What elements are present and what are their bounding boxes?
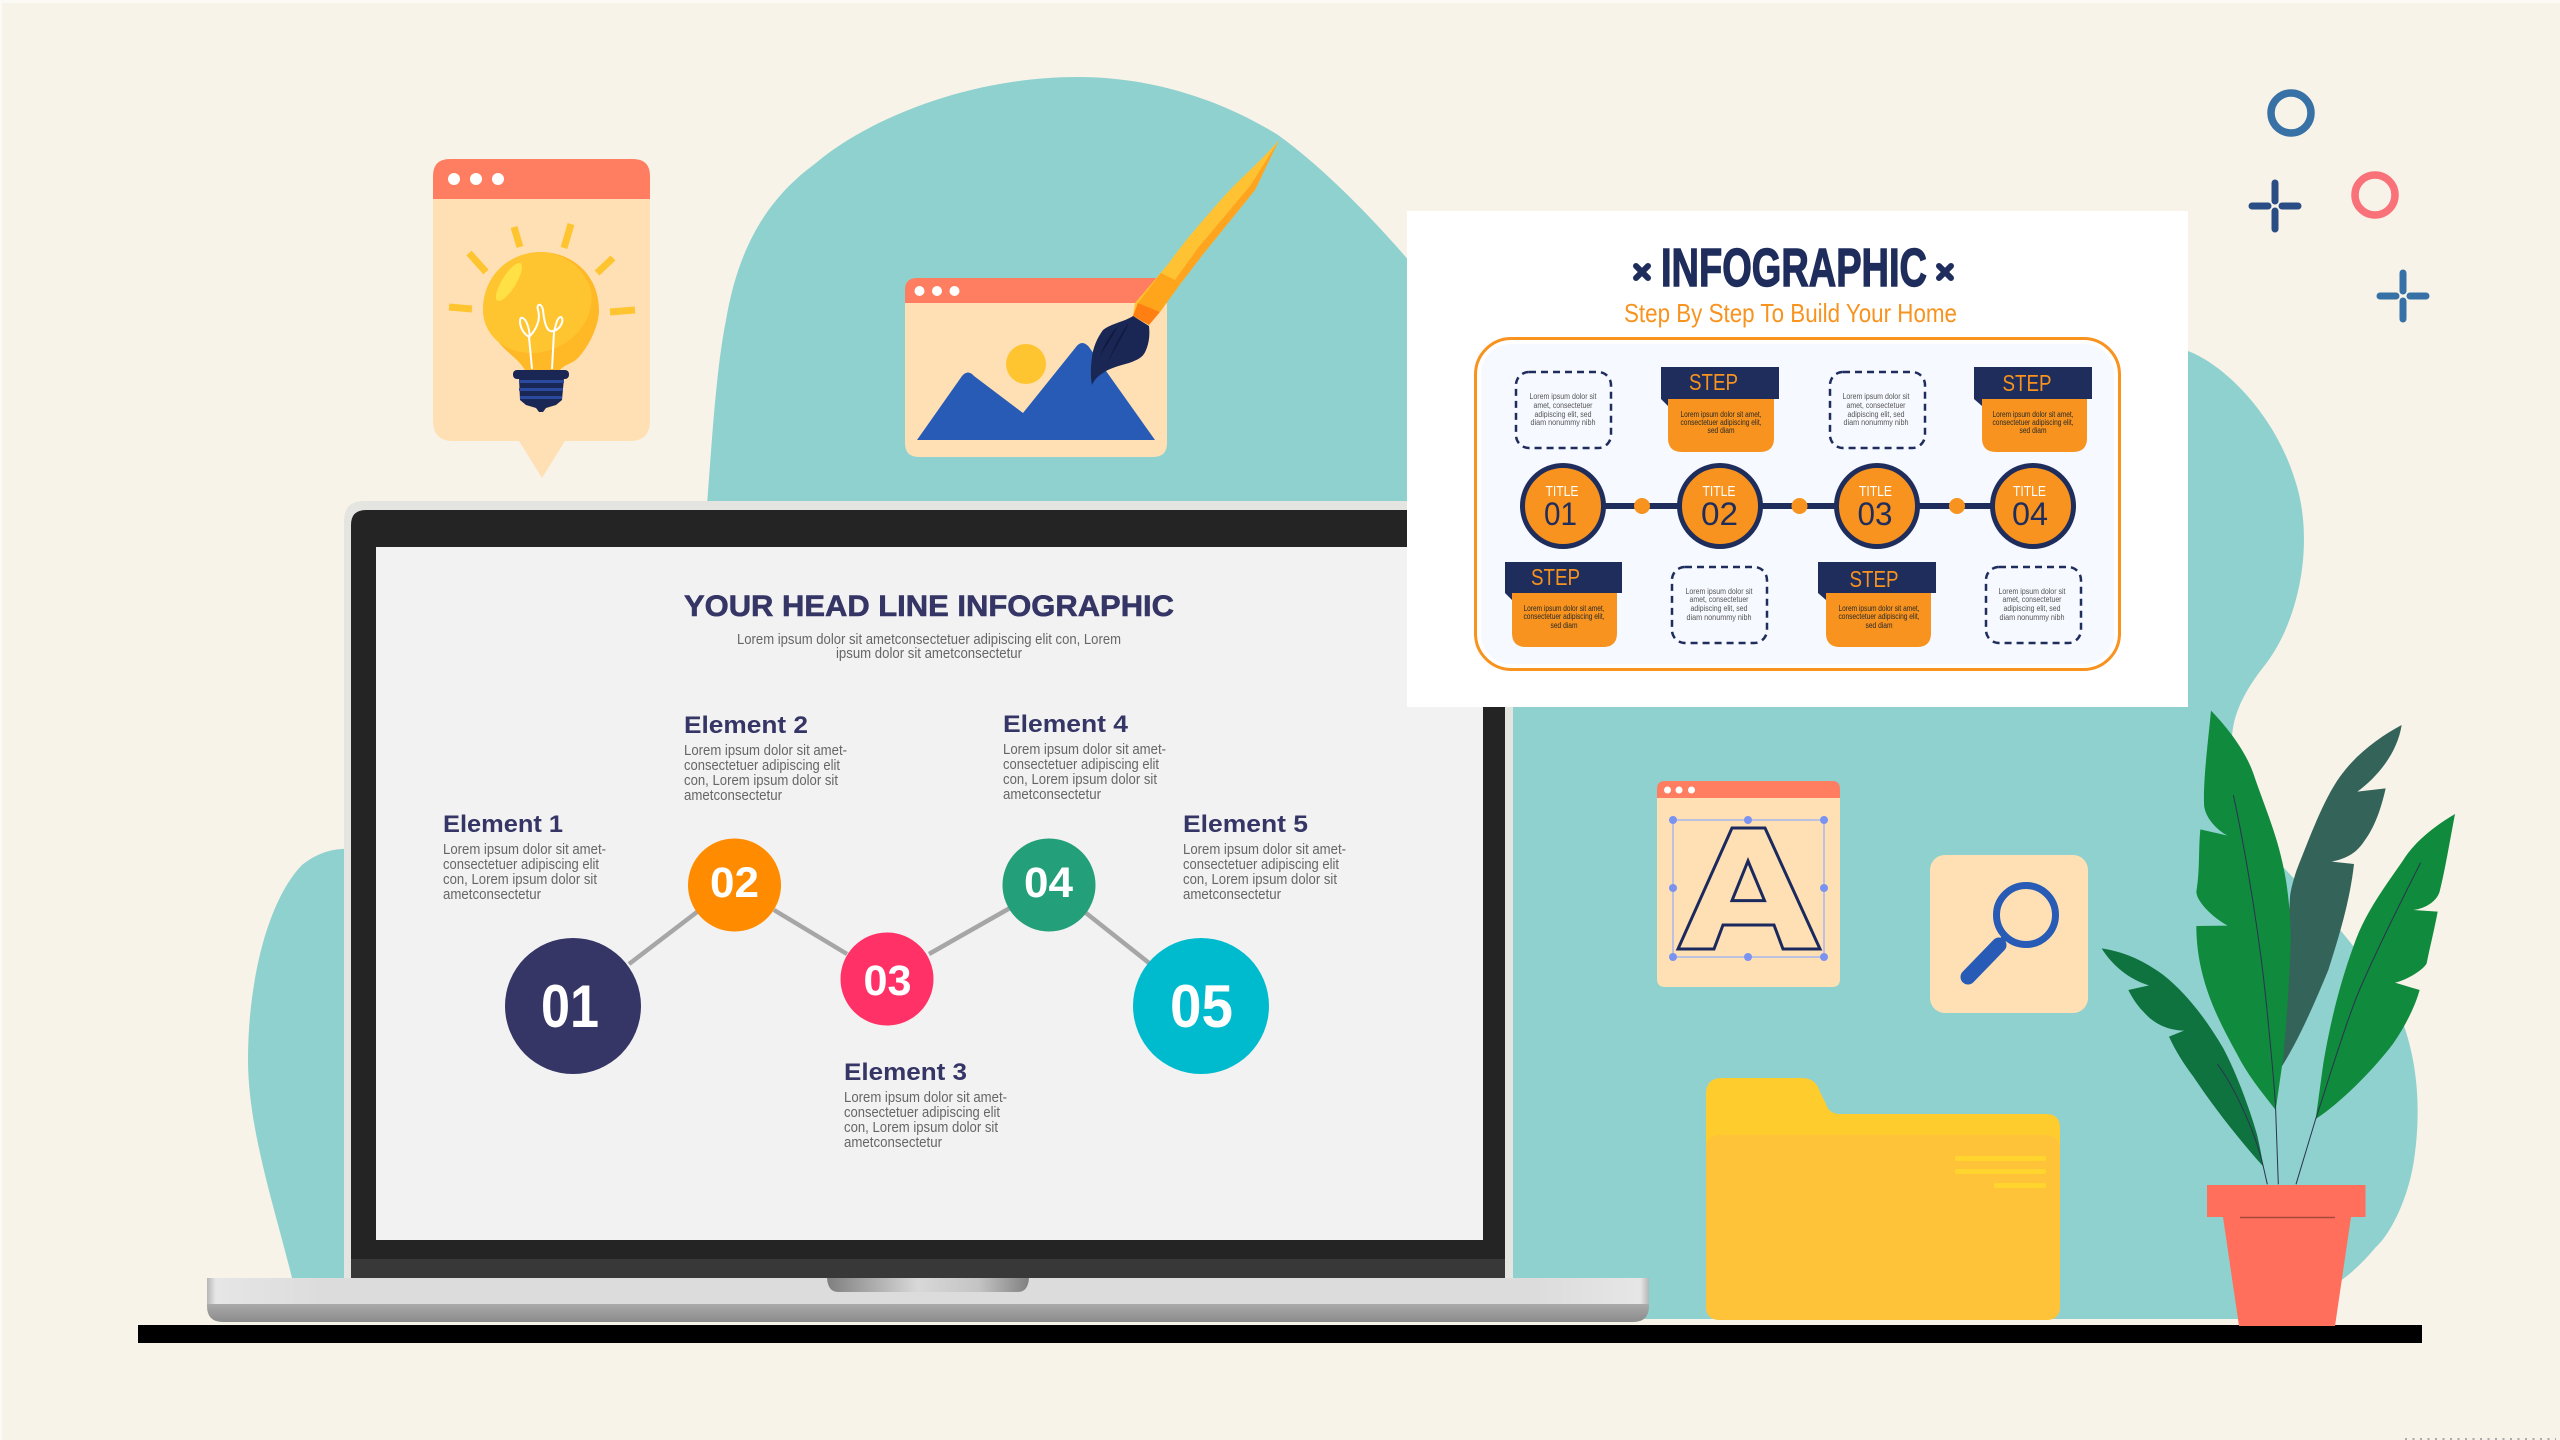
step 04 circle <box>1002 838 1096 932</box>
element 2 text: consectetuer adipiscing elit <box>684 757 841 774</box>
potted plant <box>2102 711 2455 1326</box>
step card top 2: consectetuer adipiscing elit, <box>1680 418 1762 427</box>
icon: image card with paint brush <box>905 140 1279 457</box>
step 02 circle: 02 <box>710 859 759 907</box>
screen subheading: Lorem ipsum dolor sit ametconsectetuer adipiscing elit con, Lorem <box>737 631 1121 648</box>
element 1 text: consectetuer adipiscing elit <box>443 856 600 873</box>
step 03 circle: 03 <box>864 957 912 1005</box>
element 5 text: Element 5 <box>1183 811 1308 838</box>
step 01 circle <box>505 938 641 1074</box>
element 2 text: ametconsectetur <box>684 787 782 804</box>
title circle 01: 01 <box>1544 496 1577 532</box>
dashed note bottom 2: adipiscing elit, sed <box>1690 604 1748 613</box>
step card bottom 1: consectetuer adipiscing elit, <box>1524 612 1604 621</box>
element 4 text: ametconsectetur <box>1003 786 1101 803</box>
dashed note top 1: diam nonummy nibh <box>1530 418 1596 427</box>
element 3 text: con, Lorem ipsum dolor sit <box>844 1119 999 1136</box>
dashed note top 3: Lorem ipsum dolor sit <box>1842 392 1910 401</box>
element 5 text: ametconsectetur <box>1183 886 1281 903</box>
laptop base <box>207 1278 1649 1322</box>
step card top 2: sed diam <box>1708 426 1735 435</box>
element 1 text: Lorem ipsum dolor sit amet- <box>443 841 606 858</box>
title circle 02: TITLE <box>1702 483 1736 500</box>
step 04 circle: 04 <box>1024 859 1073 907</box>
dashed note top 1: adipiscing elit, sed <box>1534 410 1592 419</box>
dashed note bottom 4: Lorem ipsum dolor sit <box>1998 587 2066 596</box>
connector lines <box>629 908 1149 964</box>
element 2 text: Element 2 <box>684 712 808 739</box>
dashed note top 3: amet, consectetuer <box>1846 401 1906 410</box>
element 3 text: consectetuer adipiscing elit <box>844 1104 1001 1121</box>
element 3 text <box>844 1059 1007 1151</box>
panel subtitle: Step By Step To Build Your Home <box>1624 298 1957 328</box>
element 4 text: con, Lorem ipsum dolor sit <box>1003 771 1158 788</box>
step card bottom 1 <box>1505 562 1622 647</box>
icon: decorative circles and crosses <box>2252 93 2426 319</box>
element 1 text <box>443 811 606 903</box>
element 2 text: Lorem ipsum dolor sit amet- <box>684 742 847 759</box>
step 02 circle <box>688 838 781 932</box>
dashed note top 3: diam nonummy nibh <box>1844 418 1908 427</box>
title circle 01 <box>1522 466 1604 546</box>
title circle 02: 02 <box>1701 496 1738 532</box>
step card bottom 3: consectetuer adipiscing elit, <box>1838 612 1920 621</box>
dashed note top 3: adipiscing elit, sed <box>1848 410 1904 419</box>
element 5 text: consectetuer adipiscing elit <box>1183 856 1340 873</box>
dashed note bottom 4: amet, consectetuer <box>2002 595 2062 604</box>
title circle 01: TITLE <box>1546 483 1578 500</box>
element 5 text: Lorem ipsum dolor sit amet- <box>1183 841 1346 858</box>
step card bottom 1: sed diam <box>1550 621 1578 630</box>
element 5 text <box>1183 811 1346 903</box>
dashed note bottom 4: diam nonummy nibh <box>2000 613 2064 622</box>
element 3 text: ametconsectetur <box>844 1134 942 1151</box>
step card bottom 3: STEP <box>1850 566 1898 592</box>
dashed note bottom 2: Lorem ipsum dolor sit <box>1686 587 1753 596</box>
title circle 03: TITLE <box>1859 483 1892 500</box>
element 1 text: Element 1 <box>443 811 563 838</box>
shelf <box>138 1325 2422 1343</box>
icon: magnifier card <box>1930 855 2088 1013</box>
icon: letter A type card <box>1657 781 1840 987</box>
element 2 text <box>684 712 847 804</box>
step card top 4 <box>1974 367 2092 452</box>
step 01 circle: 01 <box>541 973 599 1040</box>
step card top 4: sed diam <box>2020 426 2047 435</box>
step 05 circle: 05 <box>1170 973 1233 1040</box>
laptop <box>207 501 1649 1322</box>
screen subheading <box>737 631 1121 662</box>
step card top 2: STEP <box>1689 369 1738 395</box>
dashed note bottom 2: amet, consectetuer <box>1690 595 1749 604</box>
element 4 text: Lorem ipsum dolor sit amet- <box>1003 741 1166 758</box>
element 1 text: con, Lorem ipsum dolor sit <box>443 871 598 888</box>
step card top 2: Lorem ipsum dolor sit amet, <box>1680 410 1762 419</box>
plant leaves <box>2102 711 2455 1184</box>
step card top 4: Lorem ipsum dolor sit amet, <box>1992 410 2074 419</box>
icon: light bulb card <box>433 159 650 478</box>
title circle 04: 04 <box>2012 496 2048 532</box>
element 3 text: Lorem ipsum dolor sit amet- <box>844 1089 1007 1106</box>
panel title: INFOGRAPHIC <box>1661 238 1927 298</box>
flower pot <box>2207 1185 2366 1326</box>
panel: step by step infographic card <box>1407 211 2188 707</box>
step card bottom 3: Lorem ipsum dolor sit amet, <box>1838 604 1920 613</box>
dashed note top 1: amet, consectetuer <box>1534 401 1593 410</box>
step card bottom 3 <box>1818 562 1936 647</box>
dashed note top 1 <box>1516 372 1611 448</box>
step 03 circle <box>840 932 934 1026</box>
element 2 text: con, Lorem ipsum dolor sit <box>684 772 839 789</box>
timeline connector <box>1563 498 2033 514</box>
screen headline: YOUR HEAD LINE INFOGRAPHIC <box>684 590 1174 623</box>
dashed note bottom 2 <box>1672 567 1767 643</box>
element 1 text: ametconsectetur <box>443 886 541 903</box>
element 3 text: Element 3 <box>844 1059 967 1086</box>
step card top 2 <box>1661 367 1779 452</box>
screen subheading: ipsum dolor sit ametconsectetur <box>836 645 1022 662</box>
step card bottom 3: sed diam <box>1866 621 1893 630</box>
dashed note bottom 2: diam nonummy nibh <box>1686 613 1752 622</box>
dashed note bottom 4: adipiscing elit, sed <box>2004 604 2060 613</box>
icon: folder <box>1706 1078 2060 1320</box>
element 4 text <box>1003 711 1166 803</box>
step card top 4: STEP <box>2002 370 2052 396</box>
step card bottom 1: STEP <box>1531 564 1580 590</box>
dashed note top 1: Lorem ipsum dolor sit <box>1530 392 1597 401</box>
title circle 04 <box>1992 466 2074 546</box>
title circle 03 <box>1836 466 1918 546</box>
title circle 03: 03 <box>1858 496 1892 532</box>
teal background blob <box>248 77 2418 1319</box>
laptop lid and bezel <box>344 501 1513 1280</box>
title circle 02 <box>1680 466 1760 546</box>
element 4 text: Element 4 <box>1003 711 1129 738</box>
dashed note bottom 4 <box>1986 567 2081 643</box>
step card top 4: consectetuer adipiscing elit, <box>1992 418 2074 427</box>
step 05 circle <box>1133 938 1269 1074</box>
step card bottom 1: Lorem ipsum dolor sit amet, <box>1524 604 1604 613</box>
title circle 04: TITLE <box>2013 483 2046 500</box>
rounded frame <box>1476 338 2120 670</box>
element 4 text: consectetuer adipiscing elit <box>1003 756 1160 773</box>
element 5 text: con, Lorem ipsum dolor sit <box>1183 871 1338 888</box>
dashed note top 3 <box>1830 372 1925 448</box>
